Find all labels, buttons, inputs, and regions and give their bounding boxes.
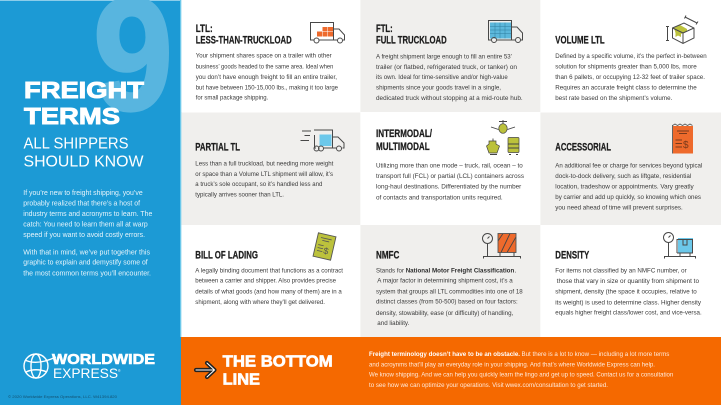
- body text: by carrier and add up quickly, so knowing which ones: [555, 194, 702, 201]
- body text: equals higher freight class/lower cost, and vice-versa.: [555, 310, 702, 317]
- body text: [376, 53, 523, 102]
- body text: than 6 pallets, or occupying 12-32 feet of trailer space.: [555, 74, 705, 81]
- title: FREIGHT: [24, 77, 144, 103]
- body text: trailer (or flatbed, refrigerated truck, or tanker) on: [376, 64, 517, 71]
- icon: scale with crate: [482, 234, 520, 258]
- body text: for small package shipping.: [196, 95, 268, 102]
- intro text: the most common terms you’ll encounter.: [23, 270, 151, 277]
- icon: LTL truck: [310, 22, 344, 43]
- body text: long-haul destinations. Differentiated by the number: [376, 184, 522, 191]
- intro text: probably realized that there’s a host of: [23, 201, 140, 208]
- body text: its own. Ideal for time-sensitive and/or high-value: [376, 74, 508, 81]
- panel: the bottom line: [181, 337, 721, 405]
- body text: [376, 267, 523, 327]
- body text: system that groups all LTL commodities into one of 18: [376, 288, 523, 295]
- body text: or space than a Volume LTL shipment will allow, it’s: [195, 171, 334, 178]
- heading: LTL:: [196, 23, 213, 35]
- panel: intro sidebar: [0, 0, 181, 405]
- body text: location, tradeshow or appointments. Vary greatly: [555, 184, 694, 191]
- body text: [195, 267, 343, 306]
- heading: NMFC: [376, 249, 400, 261]
- heading: [223, 354, 333, 388]
- body text: .: [514, 267, 516, 274]
- icon: speeding truck: [300, 130, 344, 151]
- heading: [376, 23, 447, 46]
- panel: Bill of Lading: [181, 225, 360, 337]
- body text: you need ahead of time will prevent surprises.: [555, 204, 683, 212]
- body text: Utilizing more than one mode – truck, rail, ocean – to: [376, 163, 523, 170]
- logo: Worldwide Express: EXPRESS: [53, 365, 118, 381]
- copyright: © 2020 Worldwide Express Operations, LLC. W41394.820: [8, 395, 117, 399]
- body text: [376, 163, 525, 201]
- title: TERMS: [24, 103, 120, 129]
- body text: and liability.: [377, 320, 409, 327]
- body text: A freight shipment large enough to fill an entire 53’: [376, 53, 512, 60]
- body text: [555, 53, 707, 102]
- panel: Intermodal / Multimodal: [360, 112, 540, 225]
- body text: Freight terminology doesn’t have to be an obstacle.: [369, 351, 520, 358]
- title: SHOULD KNOW: [24, 154, 144, 171]
- panel: LTL: [181, 0, 360, 112]
- logo: Worldwide Express: [24, 352, 155, 381]
- icon: plane, ship and truck: [486, 120, 519, 154]
- panel: Partial TL: [181, 112, 360, 225]
- intro text: With that in mind, we’ve put together this: [23, 249, 151, 256]
- heading: MULTIMODAL: [376, 141, 430, 153]
- body text: Your shipment shares space on a trailer with other: [196, 53, 332, 60]
- body text: Defined by a specific volume, it’s the perfect in-between: [555, 53, 707, 60]
- body text: you don’t have enough freight to fill an entire trailer,: [196, 74, 337, 81]
- body text: distinct classes (from 50-500) based on four factors:: [376, 299, 518, 306]
- icon: arrow: [196, 363, 214, 377]
- heading: DENSITY: [555, 249, 589, 261]
- body text: shipment, density (the space it occupies, relative to: [555, 289, 697, 296]
- body text: typically arrives sooner than LTL.: [195, 192, 284, 199]
- panel: NMFC: [360, 225, 540, 337]
- body text: those that vary in size or quantity from shipment to: [557, 278, 699, 285]
- body text: its weight) is used to determine class. Higher density: [555, 299, 702, 306]
- body text: and acroynms that’ll play an everyday role in your shipping. And that’s where Worldwide Express can help.: [369, 361, 655, 368]
- body text: [196, 53, 338, 102]
- panel: FTL: [360, 0, 540, 112]
- body text: [195, 160, 334, 199]
- heading: VOLUME LTL: [555, 34, 605, 46]
- heading: LESS-THAN-TRUCKLOAD: [196, 34, 292, 46]
- body text: shipment, along with where they’ll get delivered.: [195, 299, 325, 306]
- heading: ACCESSORIAL: [555, 142, 611, 154]
- light blue divider strip: [180, 0, 181, 337]
- title: ALL SHIPPERS: [24, 135, 128, 152]
- icon: green document: $: [322, 246, 330, 256]
- icon: orange invoice: $: [683, 140, 689, 151]
- heading: PARTIAL TL: [195, 142, 240, 154]
- intro text: catch: You need to learn them all at warp: [23, 222, 148, 229]
- body text: [555, 267, 702, 317]
- body text: shipments since your goods travel in a single,: [376, 85, 501, 92]
- heading: [376, 128, 432, 153]
- body text: A legally binding document that functions as a contract: [195, 267, 343, 274]
- heading: FTL:: [376, 23, 393, 35]
- logo: Worldwide Express: WORLDWIDE: [52, 352, 155, 368]
- icon: box with dimensions: [666, 16, 698, 44]
- body text: Less than a full truckload, but needing more weight: [195, 160, 333, 167]
- body text: Requires an accurate freight class to determine the: [555, 85, 697, 92]
- body text: But there is a lot to know — including a lot more terms: [522, 351, 670, 358]
- body text: a truck’s sole occupant, so it’s handled less and: [195, 181, 322, 188]
- body text: solution for shipments greater than 5,000 lbs, more: [555, 64, 697, 71]
- body text: density, stowability, ease (or difficulty) of handling,: [376, 310, 513, 317]
- body text: [555, 163, 703, 212]
- body text: dock-to-dock delivery, such as liftgate, residential: [555, 173, 692, 180]
- panel: Volume LTL: [540, 0, 721, 112]
- intro text: [23, 190, 152, 277]
- title: [24, 77, 144, 171]
- body text: A major factor in determining shipment cost, it’s a: [377, 278, 513, 285]
- heading: FULL TRUCKLOAD: [376, 34, 447, 46]
- logo: Worldwide Express: ®: [118, 369, 121, 373]
- intro text: If you’re new to freight shipping, you’ve: [23, 190, 143, 197]
- body text: details of what goods (and how many of them) are in a: [195, 288, 342, 295]
- body text: business’ goods headed to the same area. Ideal when: [196, 63, 333, 70]
- body text: to see how we can optimize your operations. Visit wwex.com/consultation to get started.: [369, 382, 608, 389]
- body text: of contacts and transportation units required.: [376, 194, 503, 201]
- icon: green document: [313, 233, 336, 260]
- body text: best rate based on the shipment’s volume.: [555, 95, 672, 102]
- body text: National Motor Freight Classification: [406, 267, 514, 274]
- intro text: industry terms and acronyms to learn. The: [23, 211, 152, 218]
- heading: [196, 23, 292, 46]
- body text: dedicated truck without stopping at a mid-route hub.: [376, 95, 523, 102]
- body text: transport full (FCL) or partial (LCL) containers across: [376, 173, 525, 180]
- heading: LINE: [223, 371, 260, 388]
- heading: INTERMODAL/: [376, 128, 432, 140]
- body text: For items not classified by an NMFC number, or: [555, 267, 687, 274]
- body text: We know shipping. And we can help you quickly learn the lingo and get up to speed. Contact us for a consultation: [369, 372, 673, 379]
- body text: but have between 150-15,000 lbs., making it too large: [196, 84, 338, 91]
- panel: Accessorial: [540, 112, 721, 225]
- heading: BILL OF LADING: [195, 249, 258, 261]
- body text: [369, 351, 673, 389]
- body text: between a carrier and shipper. Also provides precise: [195, 278, 336, 285]
- icon: orange invoice: [672, 124, 693, 154]
- icon: scale with package: [664, 232, 696, 258]
- body text: Stands for: [376, 267, 405, 274]
- intro text: speed if you want to avoid costly errors.: [23, 232, 145, 239]
- intro text: graphic to explain and demystify some of: [23, 260, 148, 267]
- body text: An additional fee or charge for services beyond typical: [555, 163, 703, 170]
- panel: Density: [540, 225, 721, 337]
- icon: FTL truck: [488, 20, 522, 42]
- heading: THE BOTTOM: [223, 354, 333, 371]
